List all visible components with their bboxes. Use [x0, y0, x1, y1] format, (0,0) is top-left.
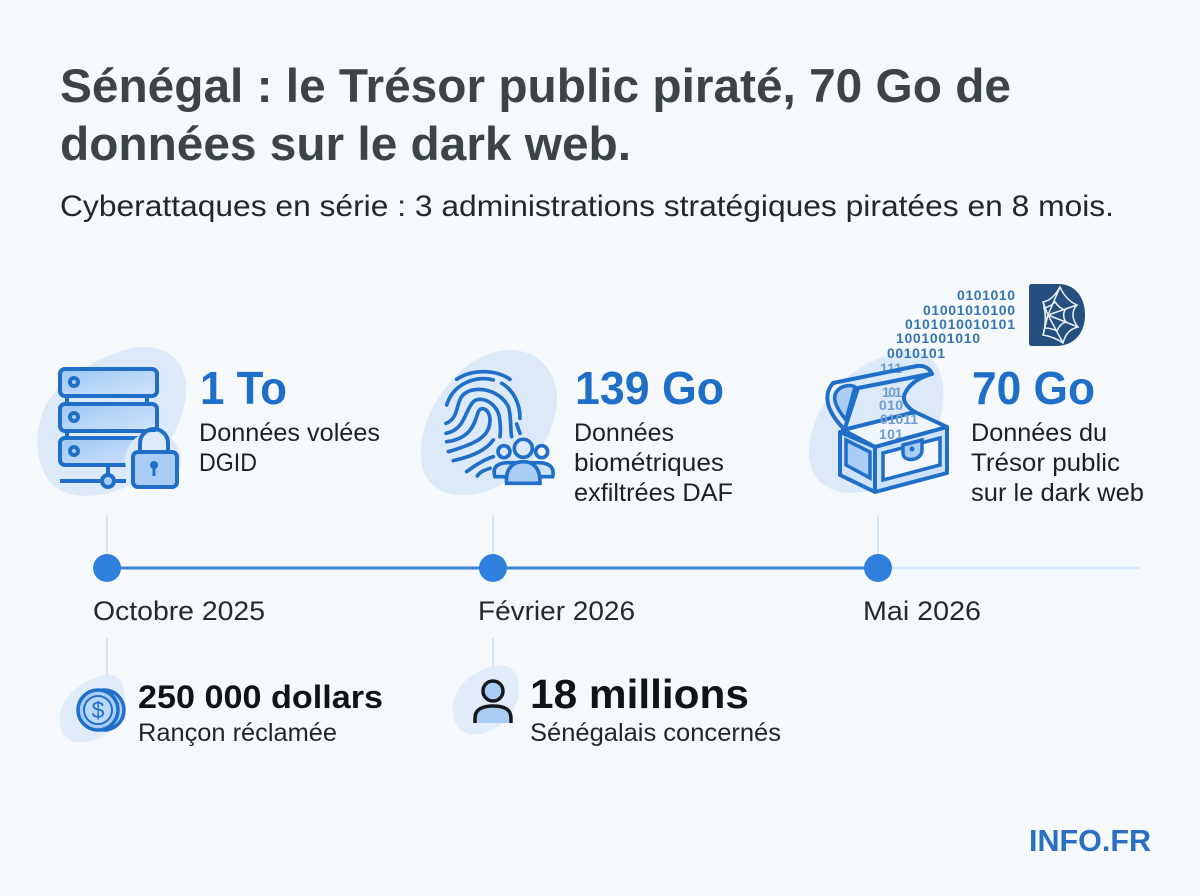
stat: 70 Go: Données du [971, 419, 1107, 447]
timeline: Février 2026 [478, 596, 635, 626]
binary stream: 01011 [880, 411, 918, 427]
icon: person [453, 665, 519, 734]
icon: coins: $ [92, 697, 105, 723]
binary stream: 0101010 [957, 287, 1015, 303]
binary stream: 0101010010101 [905, 316, 1015, 332]
stat: 139 Go: 139 Go [575, 362, 724, 414]
icon: treasure chest with binary stream [809, 287, 1015, 493]
binary stream: 1001001010 [896, 330, 980, 346]
stat: ransom [138, 679, 383, 747]
stat: people: 18 millions [530, 671, 749, 717]
chest body [840, 427, 947, 492]
binary stream: 0010101 [887, 345, 945, 361]
binary stream: 101 [882, 384, 902, 400]
binary stream [879, 287, 1015, 442]
stat: 70 Go: 70 Go [972, 362, 1095, 414]
chest interior [843, 412, 947, 447]
icon: fingerprint with people [421, 350, 557, 495]
timeline: Mai 2026 [863, 596, 981, 626]
stat: 70 Go: sur le dark web [971, 479, 1144, 507]
stat: people [530, 671, 781, 747]
binary stream: 111 [880, 360, 902, 376]
binary stream: 010 [879, 397, 903, 413]
title: données sur le dark web. [60, 117, 631, 170]
title [60, 59, 1011, 170]
icon: dark web spider web [1029, 284, 1085, 346]
icon: server with padlock [37, 347, 186, 496]
icon: coins [59, 675, 125, 742]
lid [827, 366, 932, 428]
stat: 139 Go: biométriques [574, 449, 724, 477]
stat: 70 Go: Trésor public [971, 449, 1120, 477]
stat: 1 To: Données volées [199, 419, 380, 447]
binary stream: 101 [879, 426, 903, 442]
stat: 1 To: DGID [199, 449, 257, 477]
timeline [93, 515, 1139, 675]
stat: people: Sénégalais concernés [530, 719, 781, 747]
stat: 139 Go: Données [574, 419, 674, 447]
stat: 70 Go [971, 362, 1144, 507]
logo: INFO.FR [1029, 823, 1151, 858]
subtitle: Cyberattaques en série : 3 administrations stratégiques piratées en 8 mois. [60, 190, 1114, 223]
stat: 139 Go: exfiltrées DAF [574, 479, 733, 507]
binary stream: 01001010100 [923, 302, 1015, 318]
timeline: Octobre 2025 [93, 596, 265, 626]
stat: ransom: Rançon réclamée [138, 719, 337, 747]
stat: 139 Go [574, 362, 733, 507]
stat: 1 To: 1 To [200, 362, 287, 414]
stat: ransom: 250 000 dollars [138, 679, 383, 715]
title: Sénégal : le Trésor public piraté, 70 Go de [60, 59, 1011, 112]
stat: 1 To [199, 362, 380, 477]
